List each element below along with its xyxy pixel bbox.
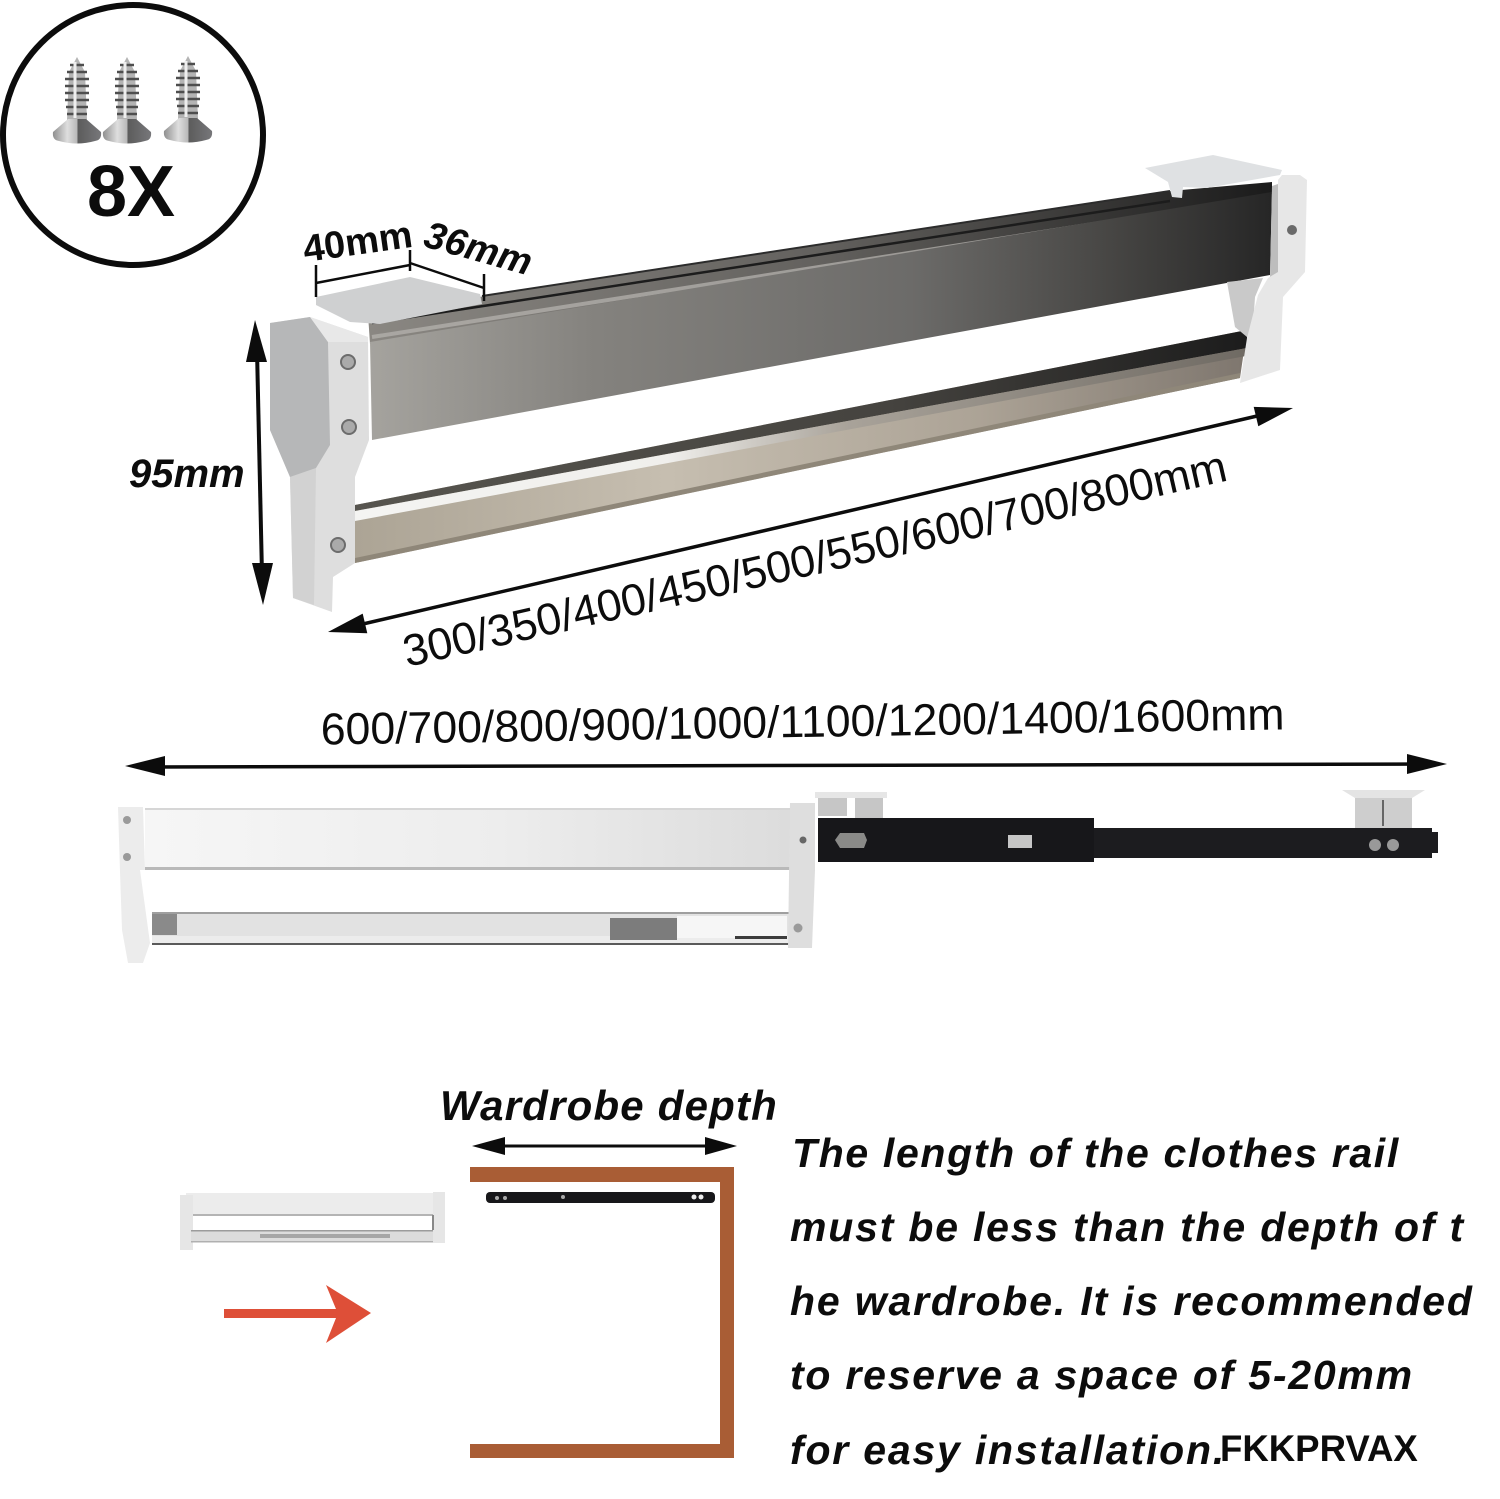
right bracket screw (1287, 225, 1297, 235)
text: installation note: FKKPRVAX (1220, 1428, 1418, 1469)
diagram: wardrobe outline (470, 1167, 734, 1458)
panel end frame (1270, 184, 1278, 278)
right bracket (1240, 175, 1307, 383)
product: extended rail side view (118, 790, 1438, 963)
dimension: wardrobe depth arrow (472, 1137, 737, 1155)
slide wide (818, 818, 1094, 862)
dimension: 36mm: 36mm (420, 214, 537, 284)
text: installation note: for easy installation. (790, 1427, 1226, 1473)
dimension: 40mm: 40mm (300, 214, 415, 271)
quantity label: 8X (87, 152, 175, 232)
white panel (145, 808, 791, 870)
left bracket (118, 807, 150, 963)
dimension: extended length (125, 690, 1447, 776)
steel panel (370, 192, 1272, 440)
left mounting plate (316, 277, 482, 324)
right mounting plate (1145, 155, 1282, 198)
dimension: extended length: 600/700/800/900/1000/1100/1200/1400/1600mm (320, 690, 1285, 754)
hanging rail (355, 330, 1247, 563)
text: installation note (790, 1130, 1474, 1473)
diagram: small rail (180, 1192, 445, 1250)
text: installation note: he wardrobe. It is recommended (790, 1278, 1474, 1324)
icon: screw 2 (103, 57, 151, 144)
right bracket (788, 803, 815, 948)
text: installation note: The length of the clothes rail (792, 1130, 1400, 1176)
text: installation note: to reserve a space of 5-20mm (790, 1352, 1414, 1398)
lower rail (152, 912, 790, 945)
icon: screws badge (3, 5, 263, 265)
mounting plate 1 (815, 792, 887, 818)
text: installation note: must be less than the depth of t (790, 1204, 1465, 1250)
dimension: rail length: 300/350/400/450/500/550/600/700/800mm (398, 442, 1231, 677)
diagram: slide in wardrobe (486, 1192, 715, 1203)
slide narrow (1094, 828, 1432, 858)
dimension: 40mm (300, 214, 415, 297)
dimension: 95mm: 95mm (129, 452, 245, 496)
chrome back edge (368, 182, 1272, 344)
arrow: red insert direction (224, 1285, 371, 1343)
left bracket (270, 317, 369, 612)
mounting plate 2 (1342, 790, 1425, 828)
heading: wardrobe depth: Wardrobe depth (440, 1082, 778, 1129)
right bracket rear leg (1227, 278, 1263, 337)
icon: screw 3 (164, 56, 212, 142)
icon: screw 1 (53, 57, 101, 144)
product: top rail (270, 155, 1307, 612)
dimension: 95mm (129, 320, 273, 605)
